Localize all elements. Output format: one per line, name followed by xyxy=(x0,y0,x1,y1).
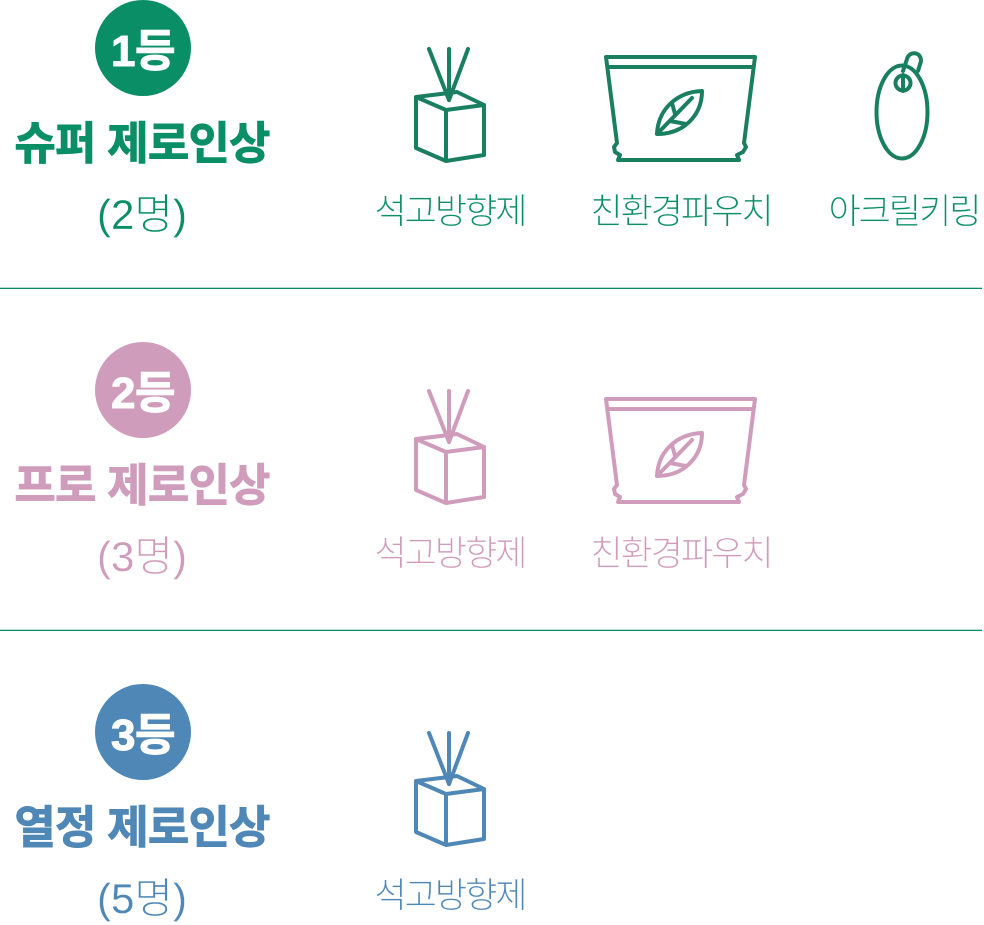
badge: 3등 xyxy=(95,684,191,780)
panel: 2nd prize xyxy=(14,342,772,580)
icon: reed diffuser xyxy=(416,49,484,161)
label: 석고방향제: 석고방향제 xyxy=(374,192,526,232)
badge: 3등: 3등 xyxy=(111,711,175,760)
label: 친환경파우치: 친환경파우치 xyxy=(590,192,772,232)
icon: acrylic keyring xyxy=(876,53,928,158)
icon: reed diffuser xyxy=(416,391,484,503)
icon: reed diffuser xyxy=(416,733,484,845)
badge: 1등 xyxy=(95,0,191,96)
label: 석고방향제: 석고방향제 xyxy=(374,876,526,916)
badge: 2등 xyxy=(95,342,191,438)
icon: eco pouch xyxy=(606,57,755,160)
panel: 1st prize xyxy=(14,0,980,238)
badge: 1등: 1등 xyxy=(111,27,175,76)
text: 3 winners: (3명) xyxy=(97,533,187,580)
label: 친환경파우치: 친환경파우치 xyxy=(590,534,772,574)
badge: 2등: 2등 xyxy=(111,369,175,418)
icon: eco pouch xyxy=(606,399,755,502)
text: 5 winners: (5명) xyxy=(97,875,187,922)
text: 2 winners: (2명) xyxy=(97,191,187,238)
label: 석고방향제: 석고방향제 xyxy=(374,534,526,574)
heading: 프로 제로인상: 프로 제로인상 xyxy=(14,460,270,511)
panel: 3rd prize xyxy=(14,684,526,922)
label: 아크릴키링: 아크릴키링 xyxy=(828,192,980,232)
heading: 열정 제로인상: 열정 제로인상 xyxy=(14,802,270,853)
heading: 슈퍼 제로인상: 슈퍼 제로인상 xyxy=(14,118,270,169)
